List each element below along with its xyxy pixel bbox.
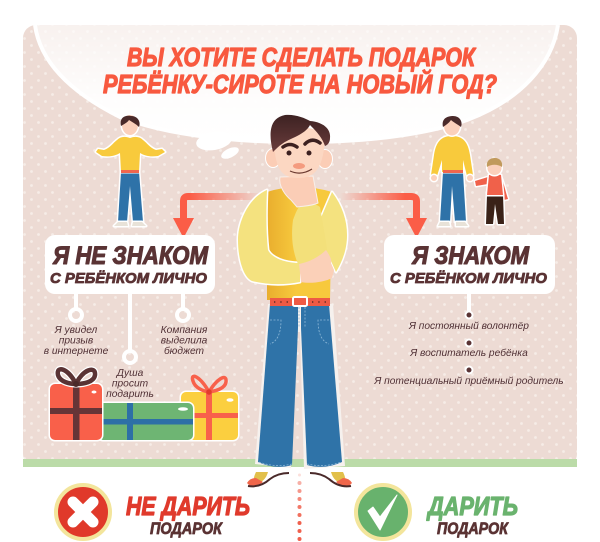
text: saw an appeal online: Я увидел bbox=[54, 325, 98, 336]
title bbox=[103, 42, 497, 99]
label: gift (do not give): ПОДАРОК bbox=[150, 519, 223, 538]
text: permanent volunteer: Я постоянный волонтёр bbox=[408, 321, 529, 332]
text: saw an appeal online: призыв bbox=[59, 336, 94, 346]
ground strip bbox=[23, 459, 577, 467]
text: child's caregiver: Я воспитатель ребёнка bbox=[409, 347, 528, 359]
card: not personally acquainted bbox=[45, 235, 215, 294]
eyes bbox=[286, 150, 312, 156]
shoes bbox=[247, 472, 352, 486]
forearm bbox=[292, 204, 327, 264]
card: not personally acquainted: С РЕБЁНКОМ ЛИЧНО bbox=[50, 270, 207, 287]
connectors: right options bbox=[466, 294, 472, 374]
label: give: ДАРИТЬ bbox=[426, 491, 518, 521]
card: personally acquainted bbox=[384, 235, 555, 294]
card: personally acquainted: Я ЗНАКОМ bbox=[411, 242, 530, 270]
icon: green gift bbox=[98, 403, 193, 440]
dotted centre line bbox=[298, 474, 302, 541]
card: not personally acquainted: Я НЕ ЗНАКОМ bbox=[52, 242, 209, 270]
ears bbox=[266, 149, 332, 168]
nose bbox=[293, 163, 305, 169]
text: saw an appeal online: в интернете bbox=[44, 346, 109, 357]
text: company allocated budget: выделила bbox=[161, 336, 208, 346]
text: potential adoptive parent: Я потенциальный приёмный родитель bbox=[373, 376, 564, 387]
figure: central thinking man bbox=[238, 115, 352, 486]
thought bubble bbox=[35, 25, 558, 161]
text: company allocated budget: бюджет bbox=[164, 345, 205, 357]
arrow: right bbox=[340, 196, 427, 238]
title: РЕБЁНКУ-СИРОТЕ НА НОВЫЙ ГОД? bbox=[103, 69, 497, 99]
lower hand bbox=[299, 250, 334, 283]
legs bbox=[255, 304, 345, 469]
right arm bbox=[320, 192, 347, 272]
vest bbox=[267, 187, 332, 300]
text: company allocated budget: Компания bbox=[161, 325, 208, 336]
text: the soul asks to give: Душа bbox=[116, 368, 144, 379]
face bbox=[274, 128, 325, 178]
figure: small man shrugging bbox=[96, 115, 165, 226]
text: the soul asks to give: подарить bbox=[106, 389, 154, 400]
title: ВЫ ХОТИТЕ СДЕЛАТЬ ПОДАРОК bbox=[127, 42, 477, 72]
label: gift (give): ПОДАРОК bbox=[437, 519, 509, 538]
connectors: left options bbox=[70, 294, 189, 363]
eyebrows bbox=[283, 140, 320, 147]
icon: red cross bbox=[56, 485, 110, 539]
label: do not give: НЕ ДАРИТЬ bbox=[126, 491, 250, 521]
neck and chin hand bbox=[280, 176, 318, 207]
card: personally acquainted: С РЕБЁНКОМ ЛИЧНО bbox=[390, 270, 547, 287]
arrow: left bbox=[173, 196, 262, 238]
icon: red gift bbox=[50, 369, 102, 440]
left arm bbox=[238, 190, 300, 284]
hair bbox=[271, 115, 330, 152]
figure: man holding child's hand bbox=[431, 116, 508, 226]
panel: dotted background bbox=[23, 25, 577, 467]
belt bbox=[270, 297, 330, 306]
figure: child bbox=[475, 158, 508, 224]
mouth bbox=[290, 169, 312, 173]
text: the soul asks to give: просит bbox=[112, 378, 149, 390]
icon: green check bbox=[356, 485, 410, 539]
icon: yellow gift bbox=[181, 376, 238, 440]
